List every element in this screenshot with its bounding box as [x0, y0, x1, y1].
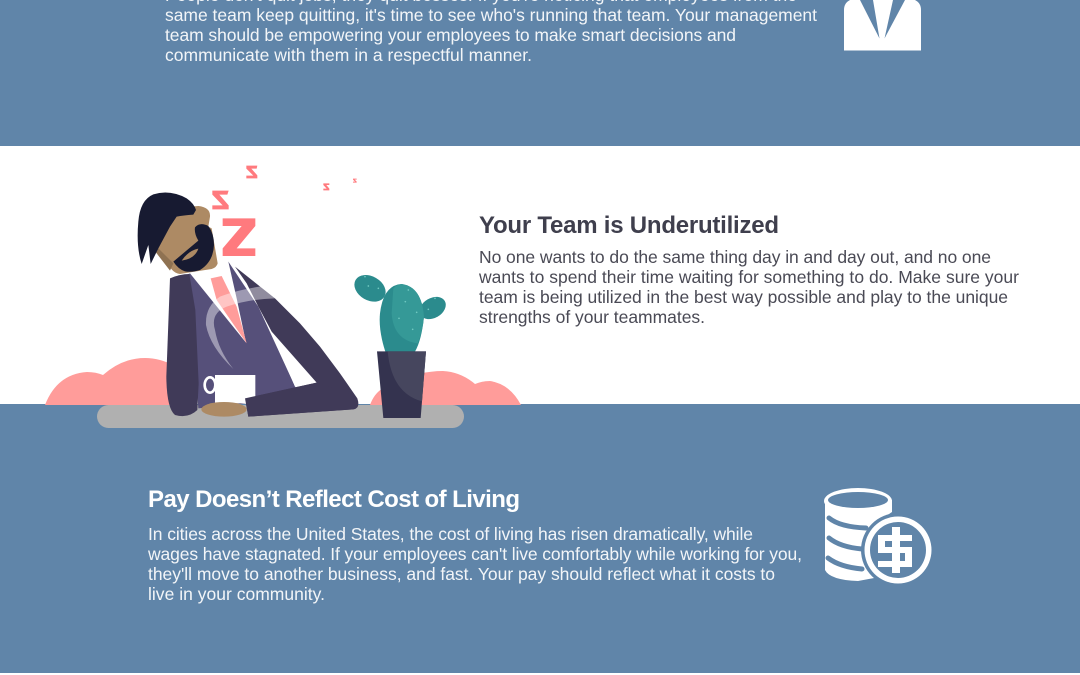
mouth	[182, 249, 198, 261]
head	[156, 206, 218, 274]
hair	[138, 193, 196, 264]
cup	[205, 375, 255, 403]
text block: pay body: live in your community.	[148, 584, 325, 604]
pot	[377, 351, 426, 418]
desk	[97, 405, 464, 428]
heading: your team is underutilized: Your Team is Underutilized	[479, 212, 779, 239]
sleep letters	[212, 166, 357, 256]
hand	[201, 402, 247, 417]
text block: underutilized body: No one wants to do the same thing day in and day out, and no one	[479, 247, 991, 267]
text block: underutilized body: wants to spend their time waiting for something to do. Make sure your	[478, 267, 1019, 287]
tie	[211, 276, 247, 343]
beard	[173, 224, 214, 272]
text block: pay body: wages have stagnated. If your employees can't live comfortably while working for you,	[147, 544, 802, 564]
text block: underutilized body	[478, 247, 1019, 327]
panel: management section	[0, 0, 1080, 146]
forearm	[245, 383, 357, 417]
illustration: sleepy man at desk	[45, 166, 521, 428]
leaning arm	[166, 274, 199, 416]
clouds	[45, 358, 521, 405]
text block: underutilized body: team is being utilized in the best way possible and play to the unique	[479, 287, 1008, 307]
text block: management body	[165, 0, 817, 65]
neck shade	[155, 247, 173, 271]
icon: coins and dollar	[824, 488, 935, 587]
text block: pay body	[147, 524, 802, 604]
text block: underutilized body: strengths of your teammates.	[479, 307, 705, 327]
far arm	[235, 267, 358, 417]
icon: suit	[844, 0, 921, 50]
cactus	[350, 270, 450, 352]
shirt	[190, 258, 246, 343]
text block: management body: team should be empowering your employees to make smart decisions and	[165, 25, 736, 45]
panel: pay section	[0, 404, 1080, 673]
heading: pay doesn't reflect cost of living: Pay Doesn’t Reflect Cost of Living	[148, 486, 520, 513]
text block: pay body: In cities across the United States, the cost of living has risen dramatically, while	[148, 524, 753, 544]
torso	[188, 262, 297, 408]
text block: management body: communicate with them in a respectful manner.	[165, 45, 532, 65]
text block: management body: same team keep quitting, it's time to see who's running that team. Your management	[165, 5, 817, 25]
steam	[206, 286, 275, 369]
panel: underutilized section	[0, 146, 1080, 404]
text block: pay body: they'll move to another business, and fast. Your pay should reflect what it costs to	[148, 564, 775, 584]
